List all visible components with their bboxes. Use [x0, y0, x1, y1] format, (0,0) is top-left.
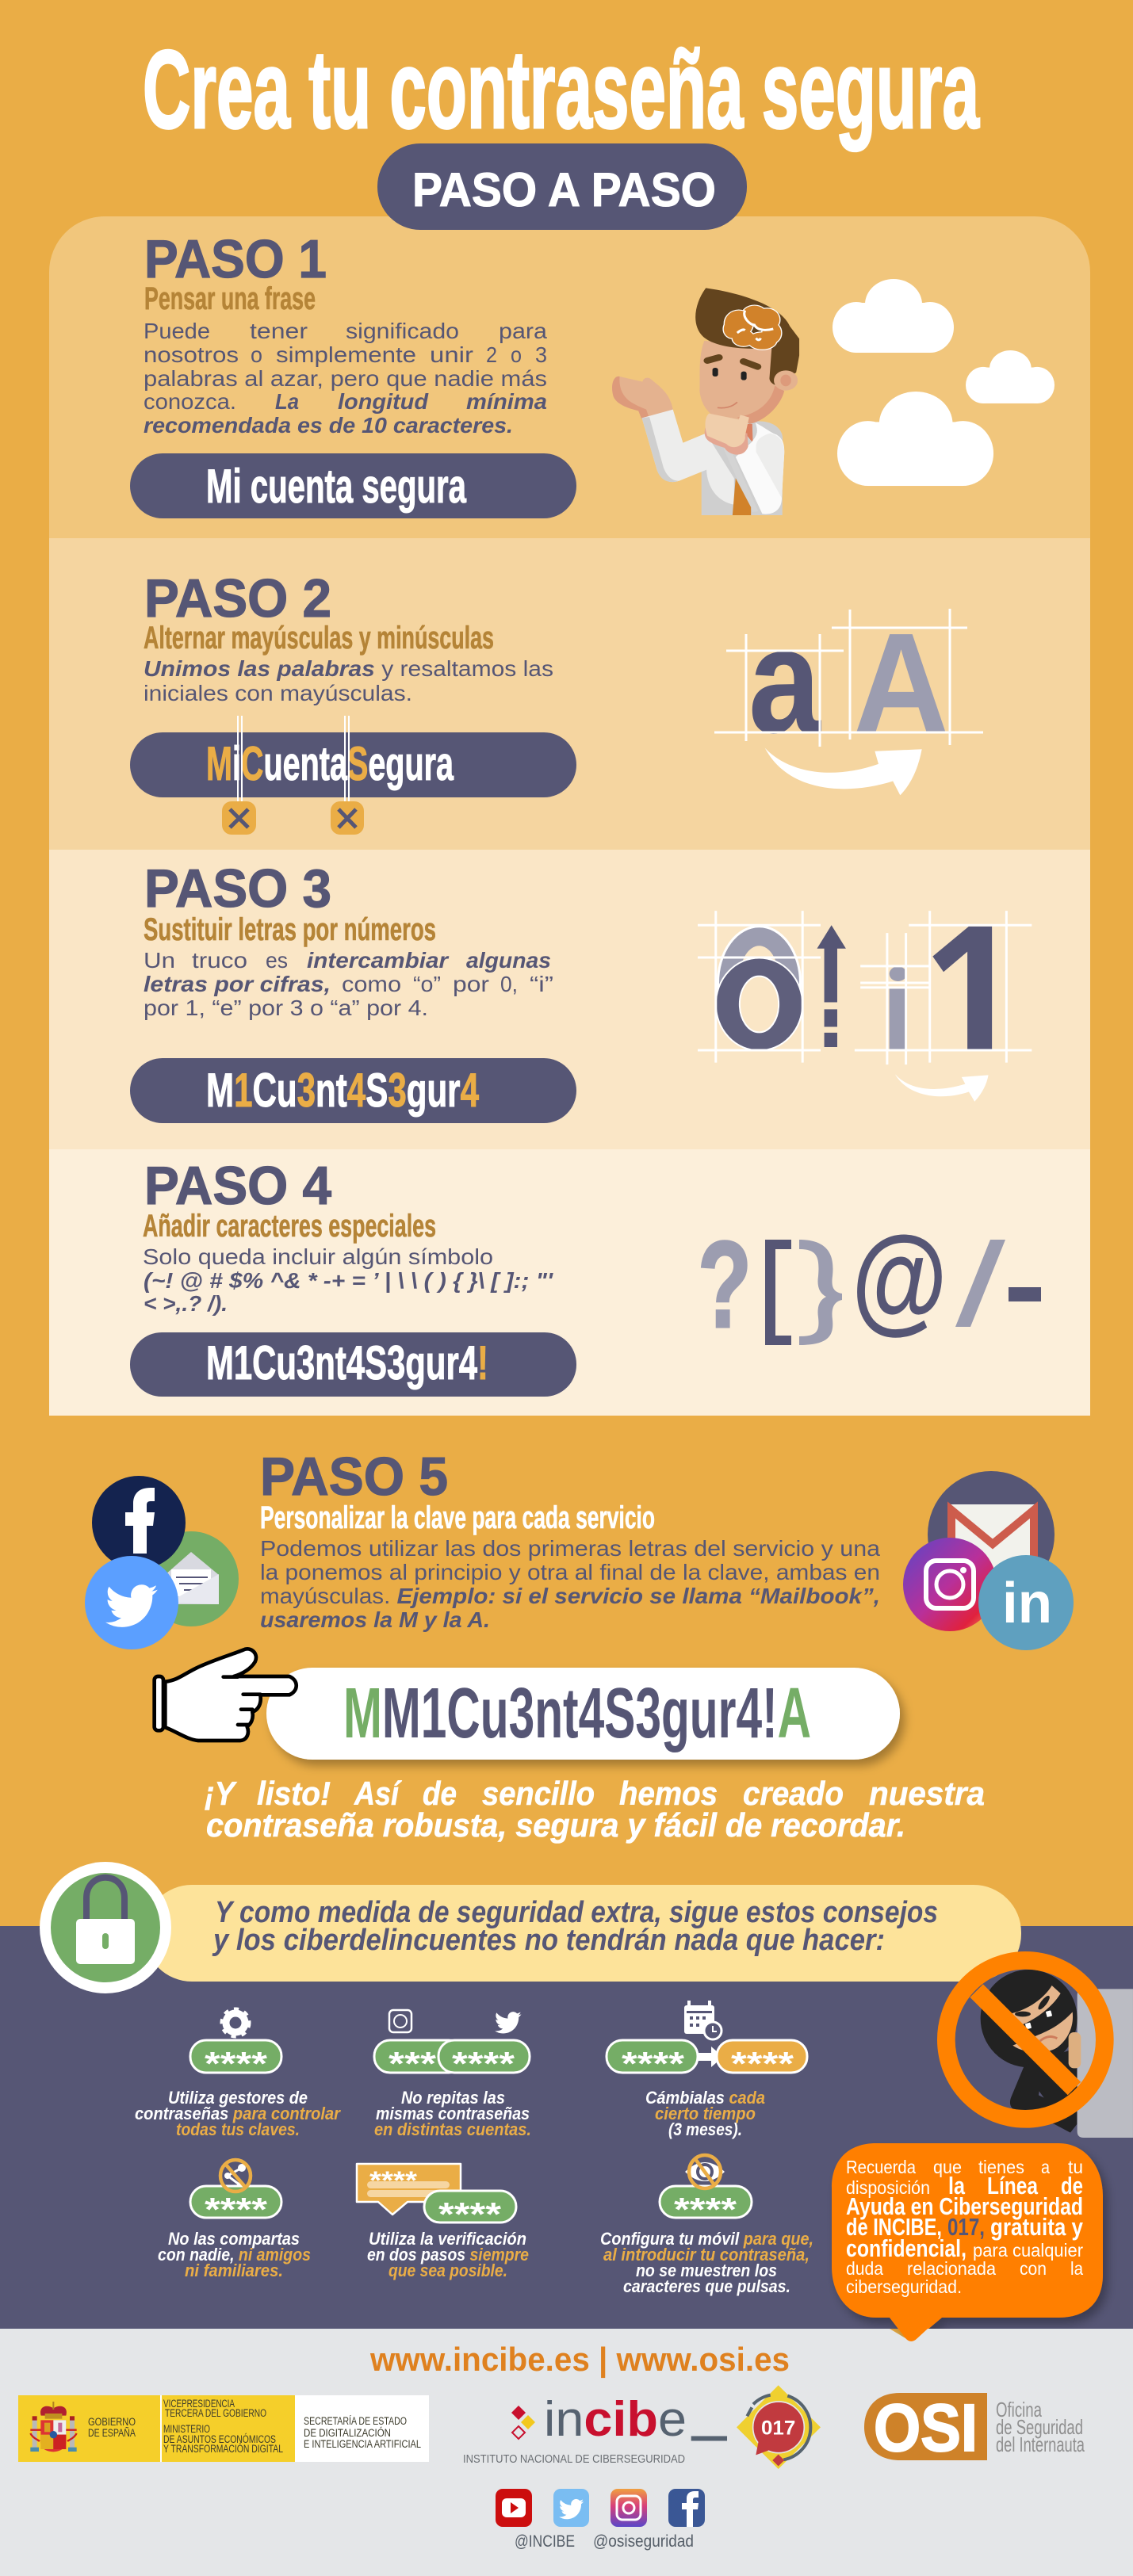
- callout: helpline: 017,: [947, 2213, 985, 2241]
- tip 3: change them: ****: [622, 2045, 685, 2082]
- text block: paso 1: tener: [250, 319, 308, 343]
- icon: 0 ! i 1: [698, 911, 1032, 1102]
- text block: paso 3: por 1, “e” por 3 o “a” por 4.: [144, 996, 428, 1020]
- button: MiCuentaSegura: [130, 732, 576, 797]
- text block: paso 3: Un: [144, 948, 175, 973]
- text block: paso 1: nosotros: [144, 342, 239, 367]
- tip 2: do not reuse: No repitas las: [401, 2088, 505, 2108]
- heading: paso 3: PASO 3: [144, 858, 331, 919]
- handles: @INCIBE: [515, 2532, 575, 2551]
- tip 5: two-step verification: Utiliza la verificación: [369, 2229, 526, 2249]
- text block: paso 3: truco: [192, 948, 247, 973]
- tip 2: do not reuse: en distintas cuentas.: [374, 2119, 531, 2139]
- closing message: ¡Y: [205, 1775, 238, 1812]
- text block: paso 1: unir: [430, 342, 473, 367]
- tip 1: password managers: ****: [205, 2045, 268, 2082]
- tip 6: hide characters: caracteres que pulsas.: [623, 2276, 790, 2296]
- banner: extra security: Y como medida de seguridad extra, sigue estos consejos: [215, 1896, 938, 1929]
- callout: helpline: a: [1041, 2157, 1050, 2177]
- text block: paso 3: como: [342, 972, 401, 996]
- tip 6: hide characters: no se muestren los: [636, 2261, 777, 2280]
- text block: paso 1: mínima: [466, 389, 547, 414]
- closing message: contraseña robusta, segura y fácil de recordar.: [206, 1806, 905, 1844]
- tip 4: do not share: No las compartas: [168, 2229, 300, 2249]
- logo: gobierno de españa: DE DIGITALIZACIÓN: [304, 2427, 391, 2439]
- text block: paso 1: palabras al azar, pero que nadie más: [144, 366, 547, 391]
- callout: helpline: duda: [846, 2258, 883, 2279]
- closing message: [205, 1775, 985, 1844]
- tip 5: two-step verification: ****: [438, 2196, 502, 2233]
- panel: paso 4: [49, 1149, 1090, 1416]
- text block: paso 3: 0,: [500, 972, 518, 996]
- text block: paso 3: “i”: [530, 972, 553, 996]
- panel: paso 2: [49, 538, 1090, 850]
- closing message: de: [423, 1775, 457, 1812]
- tip 6: hide characters: Configura tu móvil para que,: [600, 2229, 813, 2249]
- icon: padlock: [40, 1862, 171, 1993]
- subtitle: paso 2: Alternar mayúsculas y minúsculas: [144, 621, 494, 655]
- banner: extra security: [144, 1885, 1021, 1982]
- badge: paso a paso: PASO A PASO: [412, 163, 716, 216]
- text block: paso 1: para: [499, 319, 547, 343]
- callout: helpline: relacionada: [907, 2258, 996, 2279]
- icon: special characters: [698, 1211, 1041, 1353]
- text block: paso 2: [144, 656, 553, 705]
- logo: osi: [864, 2391, 1085, 2465]
- tip 3: change them: cierto tiempo: [655, 2104, 756, 2123]
- logo: gobierno de españa: Y TRANSFORMACIÓN DIGITAL: [163, 2443, 283, 2455]
- text block: paso 4: Solo queda incluir algún símbolo: [143, 1244, 493, 1269]
- text block: paso 3: es: [266, 948, 288, 973]
- callout: helpline: que: [933, 2157, 962, 2177]
- text block: paso 1: [144, 319, 547, 438]
- text block: paso 2: Unimos las palabras y resaltamos las: [144, 656, 553, 681]
- tip 6: hide characters: ****: [674, 2191, 737, 2228]
- logo: gobierno de españa: MINISTERIO: [163, 2423, 210, 2435]
- panel: paso 5: [85, 1447, 1074, 1844]
- heading: paso 2: PASO 2: [144, 568, 331, 629]
- callout: helpline: tu: [1068, 2157, 1083, 2177]
- text block: paso 3: letras por cifras,: [144, 972, 331, 996]
- text block: paso 3: intercambiar: [307, 948, 450, 973]
- button: mi cuenta segura: Mi cuenta segura: [206, 460, 466, 513]
- closing message: nuestra: [869, 1775, 985, 1812]
- logo: gobierno de españa: VICEPRESIDENCIA: [163, 2398, 235, 2410]
- links: www.incibe.es | www.osi.es: [369, 2341, 790, 2379]
- icon: letters aA: A: [853, 604, 949, 763]
- subtitle: paso 4: Añadir caracteres especiales: [143, 1209, 436, 1244]
- badge: 017: 017: [761, 2417, 795, 2440]
- text block: paso 4: (~! @ # $% ^& * -+ = ’ | \ \ ( ) { }\ [ ]:; "': [144, 1268, 553, 1293]
- logo: gobierno de españa: TERCERA DEL GOBIERNO: [165, 2407, 266, 2419]
- logo: osi: OSI: [874, 2391, 978, 2465]
- icon: thinking man: [612, 288, 799, 515]
- tip 1: password managers: todas tus claves.: [176, 2119, 300, 2139]
- tip 6: hide characters: [600, 2155, 813, 2296]
- logo: gobierno de españa: [18, 2395, 429, 2462]
- password pill: MM1Cu3nt4S3gur4!A: MM1Cu3nt4S3gur4!A: [343, 1674, 811, 1753]
- badge: paso a paso: [377, 143, 747, 230]
- text block: paso 1: Puede: [144, 319, 210, 343]
- text block: paso 5: usaremos la M y la A.: [260, 1607, 490, 1632]
- handles: @osiseguridad: [593, 2532, 694, 2551]
- icon: twitter: [553, 2489, 589, 2527]
- closing message: creado: [743, 1775, 844, 1812]
- text block: paso 3: algunas: [466, 948, 551, 973]
- tip 3: change them: [607, 2001, 807, 2139]
- text block: paso 1: recomendada es de 10 caracteres.: [144, 413, 513, 438]
- button: MiCuentaSegura: MiCuentaSegura: [206, 737, 454, 790]
- text block: paso 5: [260, 1536, 880, 1632]
- tip 5: two-step verification: ****: [369, 2166, 418, 2195]
- logo: incibe: [463, 2387, 727, 2466]
- tip 2: do not reuse: ****: [452, 2045, 515, 2082]
- subtitle: paso 3: Sustituir letras por números: [144, 912, 436, 947]
- logo: osi: de Seguridad: [996, 2415, 1083, 2439]
- tip 3: change them: (3 meses).: [668, 2119, 742, 2139]
- callout: helpline: para cualquier: [973, 2240, 1083, 2261]
- text block: paso 3: [144, 948, 553, 1020]
- icon: letters aA: a: [748, 597, 821, 765]
- logo: gobierno de españa: SECRETARÍA DE ESTADO: [304, 2415, 407, 2427]
- text block: paso 5: la ponemos al principio y otra al final de la clave, ambas en: [260, 1560, 880, 1584]
- callout: helpline: de: [1061, 2172, 1083, 2200]
- tip 5: two-step verification: [357, 2164, 529, 2280]
- tip 4: do not share: [158, 2160, 311, 2280]
- separator markers: [222, 716, 364, 835]
- text block: paso 1: simplemente: [276, 342, 416, 367]
- panel: paso 3: [49, 850, 1090, 1149]
- logo: gobierno de españa: DE ESPAÑA: [88, 2427, 136, 2439]
- subtitle: paso 5: Personalizar la clave para cada servicio: [260, 1500, 655, 1535]
- logo: gobierno de españa: GOBIERNO: [88, 2416, 136, 2428]
- text block: paso 1: La: [275, 389, 299, 414]
- callout: helpline: ciberseguridad.: [846, 2276, 962, 2297]
- icon: left social circles: [85, 1476, 239, 1649]
- callout: helpline: con: [1020, 2258, 1047, 2279]
- callout: helpline: disposición: [846, 2177, 930, 2198]
- logo: gobierno de españa: E INTELIGENCIA ARTIFICIAL: [304, 2438, 421, 2450]
- logo: gobierno de españa: DE ASUNTOS ECONÓMICOS: [163, 2433, 276, 2445]
- tip 3: change them: Cámbialas cada: [645, 2088, 765, 2108]
- footer panel: [18, 2341, 1085, 2551]
- button: mi cuenta segura: [130, 453, 576, 518]
- closing message: hemos: [619, 1775, 718, 1812]
- text block: paso 1: 3: [535, 342, 547, 367]
- icon: youtube: [496, 2489, 532, 2527]
- tip 4: do not share: ****: [205, 2191, 268, 2228]
- icon: special characters: @: [852, 1211, 947, 1344]
- text block: paso 1: conozca.: [144, 389, 236, 414]
- text block: paso 4: < >,.? /).: [144, 1291, 228, 1316]
- button: M1Cu3nt4S3gur4: [130, 1058, 576, 1123]
- text block: paso 1: o: [511, 342, 522, 367]
- text block: paso 5: mayúsculas. Ejemplo: si el servicio se llama “Mailbook”,: [260, 1584, 880, 1608]
- icon: instagram: [611, 2489, 647, 2527]
- text block: paso 3: “o”: [413, 972, 441, 996]
- tip 1: password managers: contraseñas para controlar: [135, 2104, 341, 2123]
- heading: paso 4: PASO 4: [144, 1156, 331, 1216]
- handles: [515, 2532, 694, 2551]
- tip 2: do not reuse: [374, 2010, 531, 2139]
- callout: helpline: la: [948, 2172, 966, 2200]
- panel: security tips: [0, 1862, 1133, 2341]
- icon: special characters: ?: [698, 1216, 752, 1353]
- callout: helpline: la: [1070, 2258, 1083, 2279]
- icon: coat of arms: [30, 2402, 77, 2452]
- logo: incibe: INSTITUTO NACIONAL DE CIBERSEGURIDAD: [463, 2452, 685, 2466]
- callout: helpline: [832, 2143, 1103, 2341]
- callout: helpline: Línea: [987, 2172, 1039, 2200]
- logo: osi: del Internauta: [996, 2433, 1085, 2456]
- tip 6: hide characters: al introducir tu contraseña,: [603, 2245, 810, 2265]
- closing message: listo!: [257, 1775, 331, 1812]
- banner: extra security: y los ciberdelincuentes no tendrán nada que hacer:: [212, 1924, 885, 1957]
- button: M1Cu3nt4S3gur4: M1Cu3nt4S3gur4: [206, 1064, 479, 1117]
- panel: paso 1: [49, 216, 1090, 538]
- heading: paso 5: PASO 5: [260, 1447, 448, 1507]
- text block: paso 1: longitud: [338, 389, 429, 414]
- icon: prohibited hacker: [946, 1960, 1133, 2138]
- icon: pointing hand: [155, 1649, 297, 1741]
- heading: paso 1: PASO 1: [144, 229, 327, 289]
- icon: clouds: [833, 279, 1055, 486]
- logo: osi: Oficina: [996, 2398, 1042, 2421]
- callout: helpline: de INCIBE,: [846, 2213, 942, 2241]
- button: M1Cu3nt4S3gur4!: M1Cu3nt4S3gur4!: [206, 1336, 488, 1389]
- logo: incibe: incibe: [544, 2392, 687, 2447]
- text block: paso 3: por: [453, 972, 489, 996]
- callout: helpline: gratuita y: [990, 2213, 1084, 2241]
- footer background: [0, 2329, 1133, 2576]
- icon: right social circles: in: [1002, 1572, 1052, 1635]
- logo: incibe: _: [692, 2387, 727, 2441]
- tip 2: do not reuse: mismas contraseñas: [376, 2104, 530, 2123]
- tip 5: two-step verification: que sea posible.: [389, 2261, 507, 2280]
- closing message: Así: [354, 1775, 403, 1812]
- tip 1: password managers: Utiliza gestores de: [168, 2088, 308, 2108]
- button: M1Cu3nt4S3gur4!: [130, 1332, 576, 1397]
- tip 1: password managers: [135, 2009, 341, 2139]
- text block: paso 2: iniciales con mayúsculas.: [144, 681, 412, 705]
- icon: right social circles: [903, 1471, 1074, 1650]
- text block: paso 1: 2: [486, 342, 497, 367]
- callout: helpline: Recuerda: [846, 2157, 916, 2177]
- subtitle: paso 1: Pensar una frase: [144, 281, 316, 316]
- callout: helpline: confidencial,: [846, 2234, 966, 2262]
- icon: facebook: [668, 2489, 705, 2527]
- text block: paso 4: [143, 1244, 553, 1316]
- badge: 017: [737, 2385, 821, 2469]
- callout: helpline: tienes: [978, 2157, 1024, 2177]
- text block: paso 5: Podemos utilizar las dos primeras letras del servicio y una: [260, 1536, 880, 1561]
- text block: paso 1: significado: [346, 319, 459, 343]
- tip 4: do not share: con nadie, ni amigos: [158, 2245, 311, 2265]
- icon: letters aA: [714, 597, 983, 795]
- tip 2: do not reuse: ***: [389, 2045, 437, 2082]
- text block: paso 1: o: [251, 342, 262, 367]
- tip 4: do not share: ni familiares.: [185, 2261, 283, 2280]
- closing message: sencillo: [482, 1775, 595, 1812]
- password pill: MM1Cu3nt4S3gur4!A: [266, 1668, 900, 1760]
- tip 5: two-step verification: en dos pasos siempre: [367, 2245, 529, 2265]
- tip 3: change them: ****: [731, 2045, 794, 2082]
